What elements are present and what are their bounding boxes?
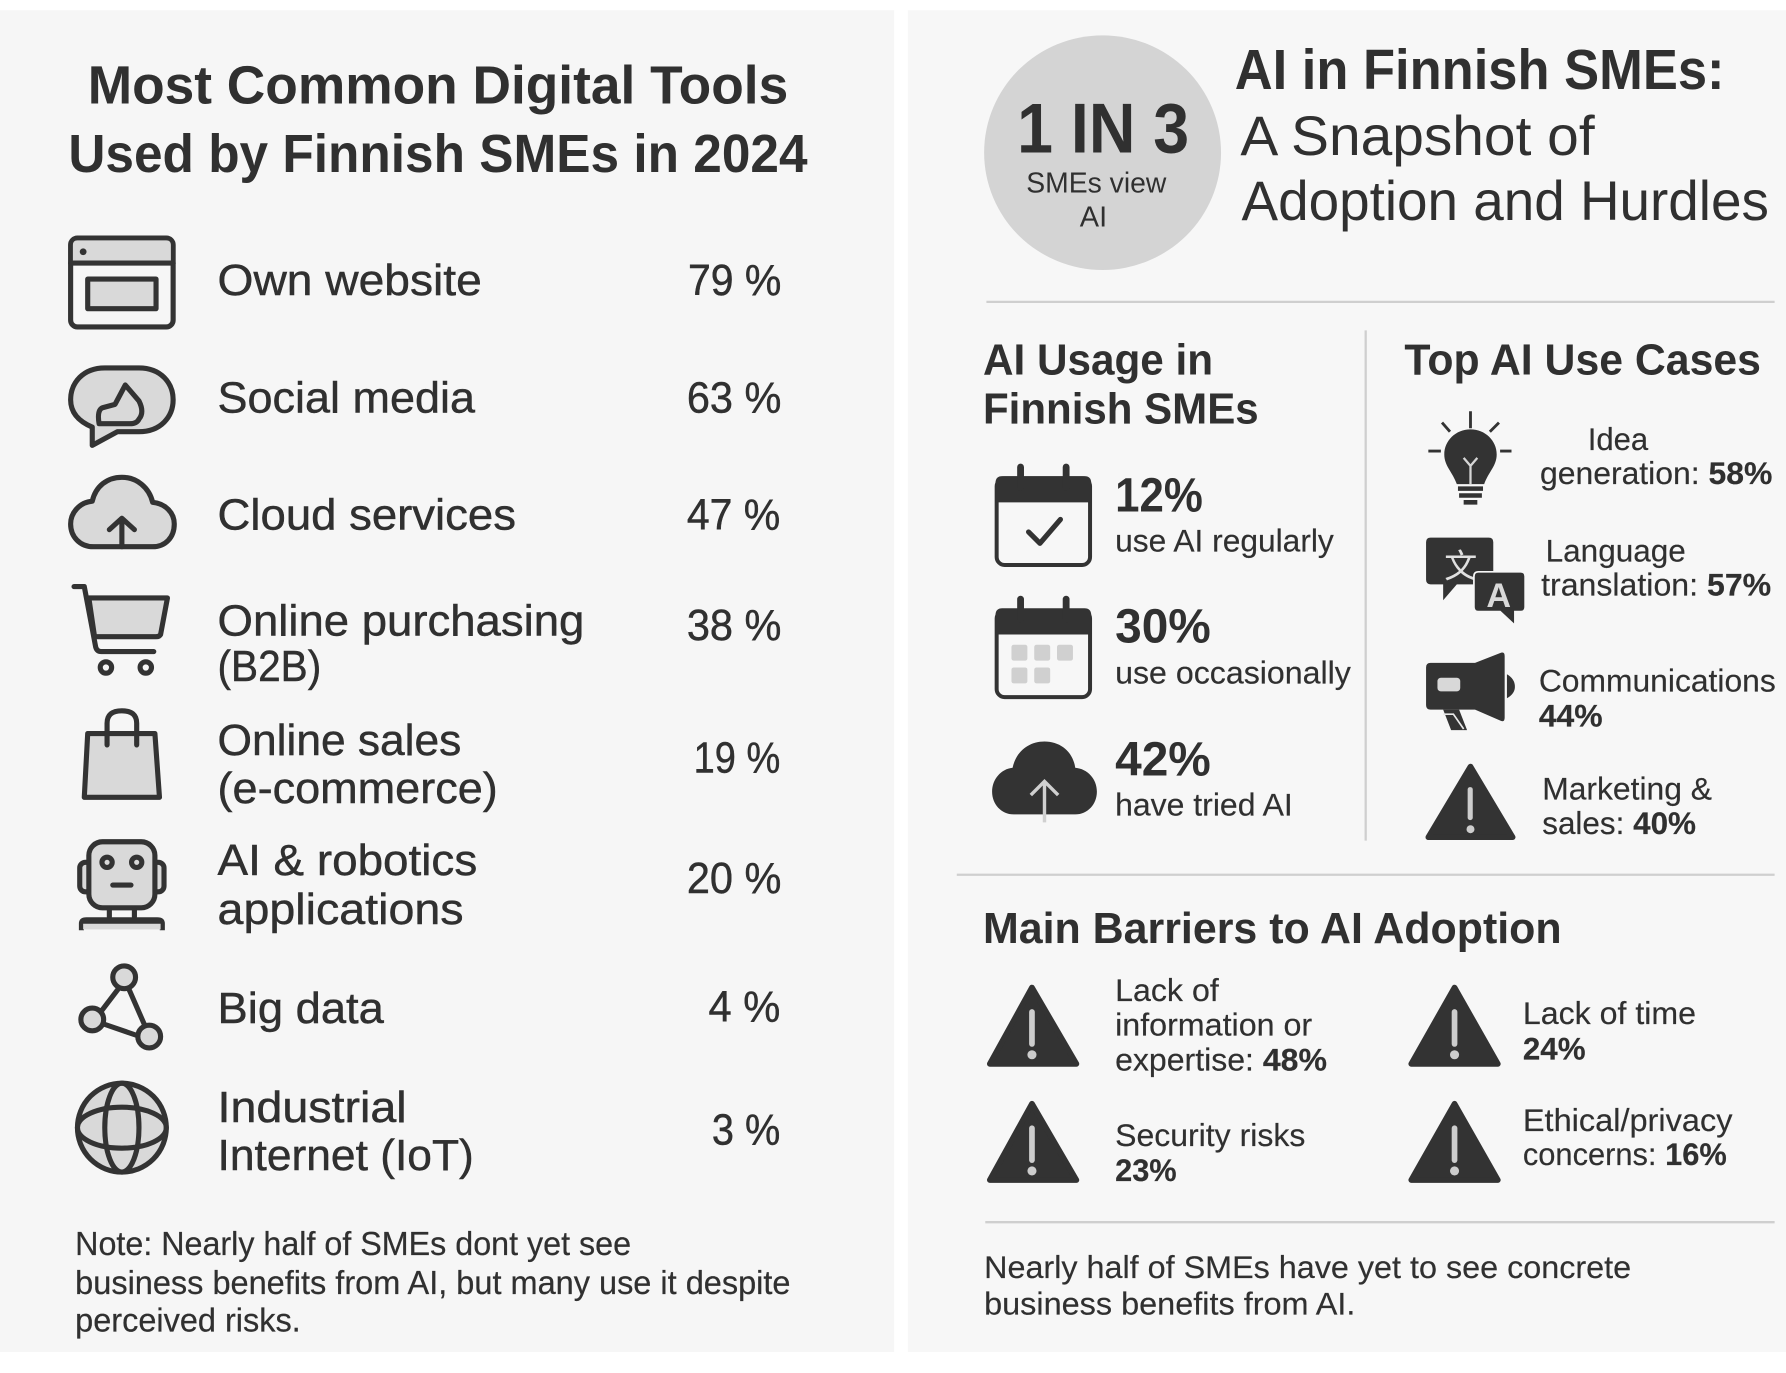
barrier: lack of time <box>1411 988 1696 1066</box>
icon: network nodes <box>81 966 161 1048</box>
barrier: lack of information <box>990 972 1327 1078</box>
icon: warning triangle <box>1428 767 1513 837</box>
stat: 12 percent regularly <box>996 467 1334 565</box>
row: ai and robotics: 20 % <box>687 855 781 903</box>
icon: translation bubbles: 文 <box>1444 547 1477 584</box>
icon: translation bubbles: A <box>1486 577 1511 615</box>
note: perceived risks. <box>75 1302 301 1339</box>
callout: 1 in 3 circle: SMEs view <box>1026 168 1167 200</box>
icon: translation bubbles <box>1426 538 1525 625</box>
barrier: lack of time: Lack of time <box>1523 995 1696 1031</box>
use case: marketing and sales: sales: 40% <box>1542 805 1696 841</box>
row: online sales <box>84 711 780 813</box>
barrier: ethical and privacy <box>1411 1102 1733 1180</box>
section: top ai use cases <box>1404 337 1776 841</box>
row: industrial internet: Industrial <box>218 1084 407 1132</box>
panel: most common digital tools <box>0 10 894 1352</box>
barrier: lack of information: Lack of <box>1115 972 1219 1008</box>
stat: 42 percent tried: 42% <box>1115 734 1211 787</box>
barrier: lack of time: 24% <box>1523 1030 1586 1066</box>
use case: language translation <box>1426 533 1771 625</box>
icon: speech bubble with thumb <box>71 368 173 445</box>
heading: digital tools: Most Common Digital Tools <box>88 57 788 116</box>
callout: 1 in 3 circle: AI <box>1080 202 1107 234</box>
row: industrial internet <box>77 1083 780 1180</box>
section: main barriers <box>983 905 1733 1188</box>
barrier: security risks: 23% <box>1115 1152 1177 1188</box>
icon: megaphone <box>1426 652 1515 730</box>
icon: warning triangle <box>1411 1104 1498 1180</box>
row: social media: Social media <box>218 374 476 422</box>
use case: idea generation: generation: 58% <box>1540 455 1772 491</box>
icon: shopping bag <box>84 711 159 797</box>
stat: 30 percent occasionally: use occasionally <box>1115 654 1351 690</box>
stat: 42 percent tried <box>992 734 1293 823</box>
icon: calendar with grid <box>996 599 1091 697</box>
icon: robot <box>80 842 164 929</box>
icon: cloud upload <box>71 477 174 547</box>
use case: communications: Communications <box>1539 662 1776 698</box>
heading: ai usage: AI Usage in <box>983 337 1213 385</box>
use case: idea generation: Idea <box>1588 421 1648 457</box>
row: social media <box>71 368 781 445</box>
note: business benefits from AI, but many use it despite <box>75 1264 790 1301</box>
stat: 30 percent occasionally: 30% <box>1115 600 1211 653</box>
barrier: ethical and privacy: Ethical/privacy <box>1523 1102 1733 1138</box>
row: online sales: 19 % <box>694 734 780 782</box>
heading: ai snapshot: AI in Finnish SMEs: <box>1235 38 1724 102</box>
barrier: ethical and privacy: concerns: 16% <box>1523 1136 1727 1172</box>
note <box>75 1225 790 1339</box>
row: big data <box>81 966 780 1048</box>
row: own website: 79 % <box>688 257 781 305</box>
row: ai and robotics: AI & robotics <box>218 837 477 885</box>
barrier: security risks: Security risks <box>1115 1117 1305 1153</box>
row: big data: Big data <box>218 985 385 1033</box>
barrier: security risks <box>990 1104 1305 1188</box>
heading: top use cases: Top AI Use Cases <box>1404 337 1761 385</box>
icon: warning triangle <box>990 1104 1076 1180</box>
icon: calendar with check <box>996 467 1091 565</box>
heading: ai snapshot: A Snapshot of <box>1240 104 1595 167</box>
row: cloud services: 47 % <box>687 492 780 540</box>
row: ai and robotics <box>80 837 781 934</box>
barrier: lack of information: information or <box>1115 1006 1313 1042</box>
barrier: lack of information: expertise: 48% <box>1115 1042 1327 1078</box>
row: big data: 4 % <box>708 984 780 1032</box>
heading: ai usage <box>983 337 1259 434</box>
heading: ai snapshot <box>1235 38 1769 232</box>
section: ai usage <box>983 337 1351 823</box>
closing statement <box>984 1249 1631 1321</box>
row: online purchasing <box>74 587 781 691</box>
icon: globe <box>77 1083 166 1172</box>
use case: language translation: translation: 57% <box>1541 567 1771 603</box>
use case: language translation: Language <box>1546 533 1686 569</box>
row: ai and robotics: applications <box>218 886 464 934</box>
icon: dark cloud upload <box>992 742 1097 822</box>
callout: 1 in 3 circle <box>984 35 1221 270</box>
row: own website: Own website <box>218 257 482 305</box>
row: online sales: Online sales <box>218 717 461 765</box>
stat: 30 percent occasionally <box>996 599 1351 697</box>
use case: marketing and sales: Marketing & <box>1542 771 1712 807</box>
use case: communications: 44% <box>1539 698 1603 734</box>
stat: 12 percent regularly: use AI regularly <box>1115 522 1334 558</box>
icon: browser window <box>71 238 173 327</box>
icon: shopping cart <box>74 587 167 673</box>
row: online purchasing: (B2B) <box>218 643 321 691</box>
icon: light bulb <box>1428 411 1511 502</box>
row: cloud services: Cloud services <box>218 492 516 540</box>
panel: ai in finnish smes <box>908 10 1786 1352</box>
row: online sales: (e-commerce) <box>218 765 498 813</box>
row: cloud services <box>71 477 780 547</box>
row: social media: 63 % <box>687 374 781 422</box>
use case: communications <box>1426 652 1776 734</box>
closing statement: business benefits from AI. <box>984 1285 1355 1321</box>
stat: 42 percent tried: have tried AI <box>1115 787 1293 823</box>
heading: ai snapshot: Adoption and Hurdles <box>1242 169 1769 232</box>
row: online purchasing: 38 % <box>687 602 781 650</box>
icon: warning triangle <box>1411 988 1498 1064</box>
heading: main barriers: Main Barriers to AI Adoption <box>983 905 1562 953</box>
heading: digital tools <box>68 57 808 184</box>
heading: digital tools: Used by Finnish SMEs in 2024 <box>68 125 808 184</box>
use case: idea generation <box>1428 411 1772 502</box>
icon: warning triangle <box>990 988 1076 1064</box>
row: own website <box>71 238 781 327</box>
use case: marketing and sales <box>1428 767 1712 841</box>
closing statement: Nearly half of SMEs have yet to see concrete <box>984 1249 1631 1285</box>
row: online purchasing: Online purchasing <box>218 598 584 646</box>
heading: ai usage: Finnish SMEs <box>983 386 1259 434</box>
callout: 1 in 3 circle: 1 IN 3 <box>1017 89 1189 168</box>
row: industrial internet: Internet (IoT) <box>218 1132 474 1180</box>
stat: 12 percent regularly: 12% <box>1115 469 1203 522</box>
row: industrial internet: 3 % <box>712 1107 780 1155</box>
note: Note: Nearly half of SMEs dont yet see <box>75 1225 631 1262</box>
